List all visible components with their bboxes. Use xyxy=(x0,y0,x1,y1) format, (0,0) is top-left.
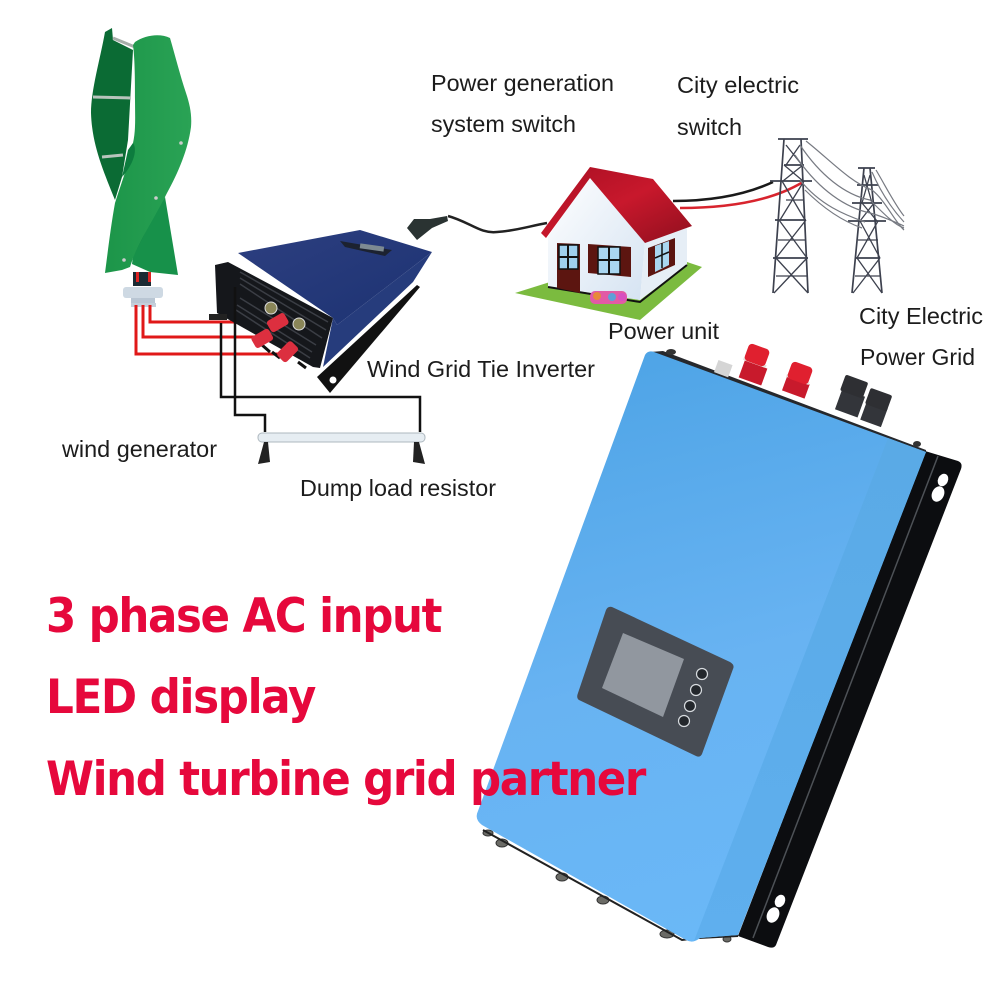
heading: 3 phase AC input: 3 phase AC input xyxy=(46,589,442,644)
black mounting bracket xyxy=(738,451,962,948)
bottom connectors xyxy=(483,830,731,942)
icon: dump load resistor xyxy=(258,433,425,464)
product: blue grid tie inverter xyxy=(477,343,962,948)
body xyxy=(477,351,926,942)
top edge and terminals xyxy=(650,343,926,456)
label: switch: switch xyxy=(677,114,742,140)
icon: house xyxy=(515,167,702,320)
heading: LED display: LED display xyxy=(46,670,316,725)
icon: transmission towers xyxy=(770,139,904,293)
label: dump load resistor: Dump load resistor xyxy=(300,475,496,501)
label: system switch: system switch xyxy=(431,111,576,137)
label: city electric: City electric xyxy=(677,72,799,98)
wires: three phase red xyxy=(136,305,282,354)
wires: black dump load xyxy=(221,287,420,432)
label: city electric power grid line 1: City Electric xyxy=(859,303,983,329)
display panel xyxy=(577,607,734,757)
heading: wind turbine grid partner: Wind turbine grid partner xyxy=(46,752,647,807)
wires: city grid black and red xyxy=(673,182,803,208)
icon: power plug and cable xyxy=(407,216,547,240)
icon: wind grid tie inverter small xyxy=(209,230,432,393)
label: wind generator: wind generator xyxy=(61,436,217,462)
label: power unit: Power unit xyxy=(608,318,720,344)
icon: vertical axis wind turbine xyxy=(91,28,191,307)
label: power generation switch: Power generation xyxy=(431,70,614,96)
label: city electric power grid line 2: Power Grid xyxy=(860,344,975,370)
label: wind grid tie inverter: Wind Grid Tie Inverter xyxy=(367,356,595,382)
